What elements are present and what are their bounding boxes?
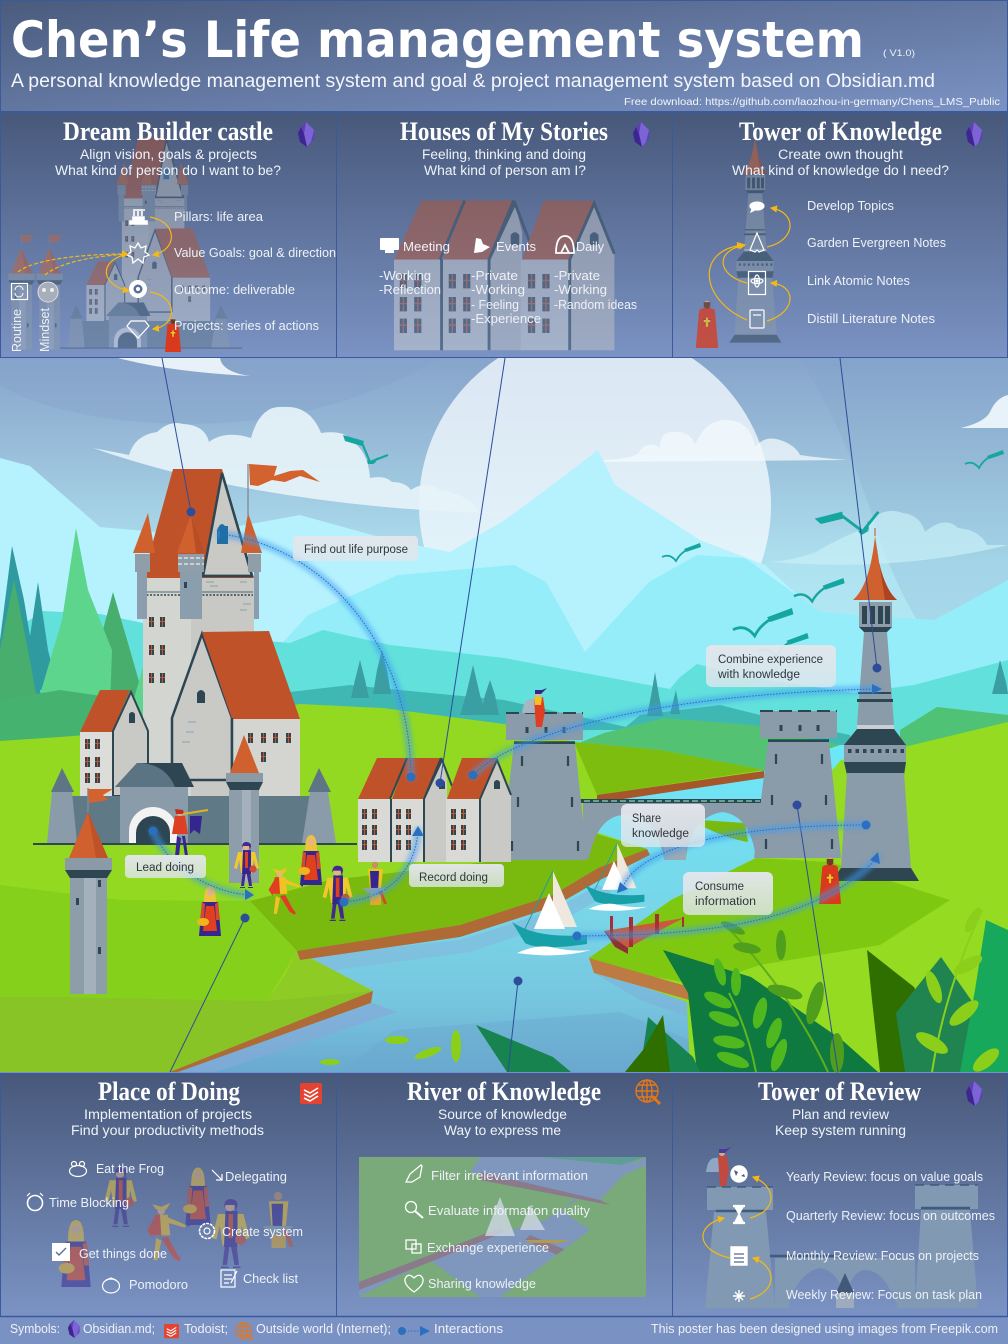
guard figure bbox=[706, 1147, 731, 1186]
middle tower bbox=[226, 735, 263, 883]
list: hierarchy: Value Goals: goal & direction bbox=[174, 246, 336, 260]
monk bbox=[819, 858, 841, 904]
label: Share knowledge: knowledge bbox=[632, 828, 689, 840]
label: Combine experience bbox=[706, 645, 836, 687]
list: methods: Eat the Frog bbox=[96, 1162, 164, 1176]
list: hierarchy: Pillars: life area bbox=[174, 210, 263, 224]
teal ranges bbox=[0, 611, 1008, 760]
left land bbox=[0, 704, 764, 1072]
list: knowledge flow: Filter irrelevant information bbox=[431, 1169, 588, 1183]
forest bbox=[0, 528, 1008, 745]
birds bbox=[343, 435, 1004, 656]
panel: Tower of Knowledge bbox=[672, 112, 1008, 358]
heading: Tower of Review bbox=[758, 1077, 921, 1106]
label: Find out life purpose bbox=[293, 536, 418, 561]
panel: Dream Builder castle bbox=[0, 112, 336, 358]
icons: productivity methods bbox=[27, 1162, 237, 1293]
symbols label: Symbols: bbox=[10, 1322, 60, 1336]
list: hierarchy: Outcome: deliverable bbox=[174, 283, 295, 297]
list: hierarchy bbox=[174, 210, 336, 333]
list: knowledge steps: Garden Evergreen Notes bbox=[807, 236, 946, 250]
meeting column: -Reflection bbox=[379, 283, 441, 297]
mindset: Mindset bbox=[38, 307, 52, 352]
header banner bbox=[0, 0, 1008, 112]
subheading bbox=[438, 1107, 567, 1138]
monk figure bbox=[696, 301, 718, 348]
castle bbox=[33, 464, 357, 844]
moon bbox=[419, 329, 771, 681]
meeting column bbox=[379, 238, 450, 297]
review towers and bridge bbox=[705, 1185, 978, 1308]
interactions symbol bbox=[398, 1322, 503, 1336]
label: Record doing bbox=[409, 864, 504, 887]
list: review cycles: Quarterly Review: focus on outcomes bbox=[786, 1209, 995, 1223]
interactions symbol: Interactions bbox=[434, 1322, 503, 1336]
knowledge tower bbox=[832, 528, 919, 881]
big pale mountain bbox=[0, 450, 1008, 720]
heading: River of Knowledge bbox=[407, 1077, 601, 1106]
subheading bbox=[55, 147, 281, 178]
label: Combine experience: with knowledge bbox=[717, 669, 800, 681]
meeting column: -Working bbox=[379, 269, 431, 283]
front left tower bbox=[65, 788, 113, 994]
subheading bbox=[422, 147, 586, 178]
events column: - Feeling bbox=[471, 298, 519, 312]
panel: Tower of Review bbox=[672, 1074, 1008, 1316]
heading: Dream Builder castle bbox=[63, 117, 273, 146]
subheading: What kind of person do I want to be? bbox=[55, 163, 281, 178]
obsidian symbol bbox=[68, 1320, 155, 1338]
label: Lead doing: Lead doing bbox=[136, 862, 194, 874]
panel: River of Knowledge bbox=[336, 1074, 672, 1316]
daily column: Daily bbox=[576, 240, 605, 254]
list: knowledge steps bbox=[807, 199, 946, 326]
list: knowledge flow: Sharing knowledge bbox=[428, 1277, 536, 1291]
subtitle: A personal knowledge management system and goal & project management system based on Obsidian.md bbox=[11, 71, 935, 92]
freepik credit: This poster has been designed using images from Freepik.com bbox=[651, 1322, 998, 1336]
figure in panel bbox=[165, 318, 181, 352]
river map bbox=[359, 1157, 646, 1297]
cloud top left wisp bbox=[118, 358, 250, 376]
label: Consume information bbox=[683, 872, 773, 915]
subheading bbox=[775, 1107, 906, 1138]
obsidian icon bbox=[298, 122, 314, 147]
events column: -Private bbox=[471, 269, 518, 283]
review arrows bbox=[703, 1177, 771, 1299]
label: Find out life purpose: Find out life purpose bbox=[304, 544, 408, 556]
subheading: Align vision, goals & projects bbox=[80, 147, 257, 162]
todoist icon bbox=[300, 1083, 322, 1104]
foreground plants bbox=[320, 905, 1008, 1076]
list: hierarchy: Projects: series of actions bbox=[174, 319, 319, 333]
list: review cycles: Yearly Review: focus on value goals bbox=[786, 1170, 983, 1184]
obsidian icon bbox=[633, 122, 649, 147]
label: Consume information: Consume bbox=[695, 881, 744, 893]
subheading: Way to express me bbox=[444, 1123, 561, 1138]
man in vest bbox=[234, 842, 259, 888]
subheading: Keep system running bbox=[775, 1123, 906, 1138]
main illustrated scene bbox=[0, 329, 1008, 1076]
interaction arrows bbox=[148, 526, 882, 940]
subheading: Implementation of projects bbox=[84, 1107, 252, 1122]
label: Record doing: Record doing bbox=[419, 872, 488, 884]
panel: Houses of My Stories bbox=[336, 112, 672, 358]
subheading: Create own thought bbox=[778, 147, 903, 162]
teal green rear hills bbox=[574, 718, 840, 771]
list: knowledge flow: Exchange experience bbox=[427, 1241, 549, 1255]
subheading bbox=[732, 147, 949, 178]
river banks bbox=[597, 771, 764, 803]
daily column: -Private bbox=[554, 269, 600, 283]
woman with basket bbox=[197, 886, 221, 936]
mindset bbox=[38, 282, 58, 352]
list: methods: Check list bbox=[243, 1272, 299, 1286]
cloud left bbox=[93, 407, 540, 513]
subheading: Plan and review bbox=[792, 1107, 889, 1122]
list: methods: Create system bbox=[222, 1225, 303, 1239]
outside world symbol: Outside world (Internet); bbox=[256, 1322, 391, 1336]
title: Chen’s Life management system bbox=[11, 11, 864, 69]
icons: globe, hourglass, calendar, asterisk bbox=[731, 1166, 747, 1302]
subheading: What kind of person am I? bbox=[424, 163, 586, 178]
subheading: Feeling, thinking and doing bbox=[422, 147, 586, 162]
heading: Tower of Knowledge bbox=[739, 117, 942, 146]
obsidian symbol: Obsidian.md; bbox=[83, 1322, 155, 1336]
label: Consume information: information bbox=[695, 896, 756, 908]
list: methods: Time Blocking bbox=[49, 1196, 129, 1210]
obsidian icon bbox=[966, 1081, 982, 1106]
river bbox=[170, 745, 1008, 1072]
people bbox=[172, 688, 841, 936]
list: methods: Get things done bbox=[79, 1247, 167, 1261]
daily column: -Working bbox=[554, 283, 607, 297]
list: review cycles: Monthly Review: Focus on projects bbox=[786, 1249, 979, 1263]
meeting column: Meeting bbox=[403, 240, 450, 254]
outside world icon bbox=[636, 1080, 660, 1104]
cloud top right bbox=[961, 395, 1008, 428]
download link: Free download: https://github.com/laozhou-in-germany/Chens_LMS_Public bbox=[624, 96, 1000, 108]
jester bbox=[268, 868, 303, 915]
label: Lead doing bbox=[125, 855, 206, 878]
trumpeter bbox=[172, 809, 208, 856]
houses bbox=[358, 758, 511, 862]
bridge bbox=[583, 803, 761, 858]
blacksmith bbox=[363, 862, 387, 905]
list: methods bbox=[49, 1162, 303, 1292]
list: methods: Pomodoro bbox=[129, 1278, 188, 1292]
woman right bbox=[298, 835, 322, 885]
routine: Routine bbox=[10, 309, 24, 352]
version: ( V1.0) bbox=[883, 48, 915, 59]
man in vest right bbox=[323, 866, 353, 921]
footer legend bbox=[0, 1316, 1008, 1344]
routine bbox=[10, 284, 28, 352]
leader lines bbox=[162, 358, 881, 1072]
subheading bbox=[71, 1107, 264, 1138]
list: review cycles: Weekly Review: Focus on task plan bbox=[786, 1288, 982, 1302]
castle flag bbox=[248, 464, 320, 515]
todoist symbol: Todoist; bbox=[184, 1322, 228, 1336]
list: knowledge steps: Develop Topics bbox=[807, 199, 894, 213]
knowledge arrows bbox=[709, 208, 790, 321]
label: Share knowledge: Share bbox=[632, 813, 661, 825]
label: Combine experience: Combine experience bbox=[718, 654, 823, 666]
outside world symbol bbox=[236, 1322, 391, 1340]
todoist symbol bbox=[164, 1322, 228, 1338]
boats bbox=[512, 843, 648, 955]
right land bbox=[589, 722, 1008, 1072]
events column: Events bbox=[496, 240, 536, 254]
heading: Houses of My Stories bbox=[400, 117, 608, 146]
subheading: Find your productivity methods bbox=[71, 1123, 264, 1138]
connecting arrows bbox=[18, 217, 171, 329]
subheading: Source of knowledge bbox=[438, 1107, 567, 1122]
mid mountains bbox=[230, 555, 1008, 760]
events column: -Working bbox=[471, 283, 525, 297]
guard on tower bbox=[522, 688, 547, 727]
list: review cycles bbox=[786, 1170, 995, 1302]
list: knowledge flow: Evaluate information quality bbox=[428, 1204, 591, 1218]
icons: rocket, magnifier, exchange, heart bbox=[405, 1165, 423, 1292]
list: knowledge steps: Distill Literature Notes bbox=[807, 312, 935, 326]
right bridge tower bbox=[754, 711, 841, 858]
sky bbox=[0, 358, 1008, 738]
icons: pillars, star, target, diamond bbox=[127, 210, 149, 338]
panel: Place of Doing bbox=[0, 1074, 336, 1316]
heading: Place of Doing bbox=[98, 1077, 240, 1106]
list: knowledge steps: Link Atomic Notes bbox=[807, 274, 910, 288]
cloud right of moon bbox=[604, 420, 848, 462]
daily column: -Random ideas bbox=[554, 298, 637, 312]
subheading: What kind of knowledge do I need? bbox=[732, 163, 949, 178]
icons: bubble, tree, atom, book bbox=[748, 202, 766, 328]
daily column bbox=[554, 236, 637, 312]
events column bbox=[471, 238, 541, 326]
list: knowledge flow bbox=[427, 1169, 591, 1291]
obsidian icon bbox=[966, 122, 982, 147]
left bridge tower bbox=[500, 713, 587, 860]
label: Share knowledge bbox=[621, 804, 705, 847]
cloud far right bbox=[771, 511, 1008, 565]
list: methods: Delegating bbox=[225, 1170, 287, 1184]
events column: -Experience bbox=[471, 312, 541, 326]
dock bbox=[604, 914, 684, 954]
